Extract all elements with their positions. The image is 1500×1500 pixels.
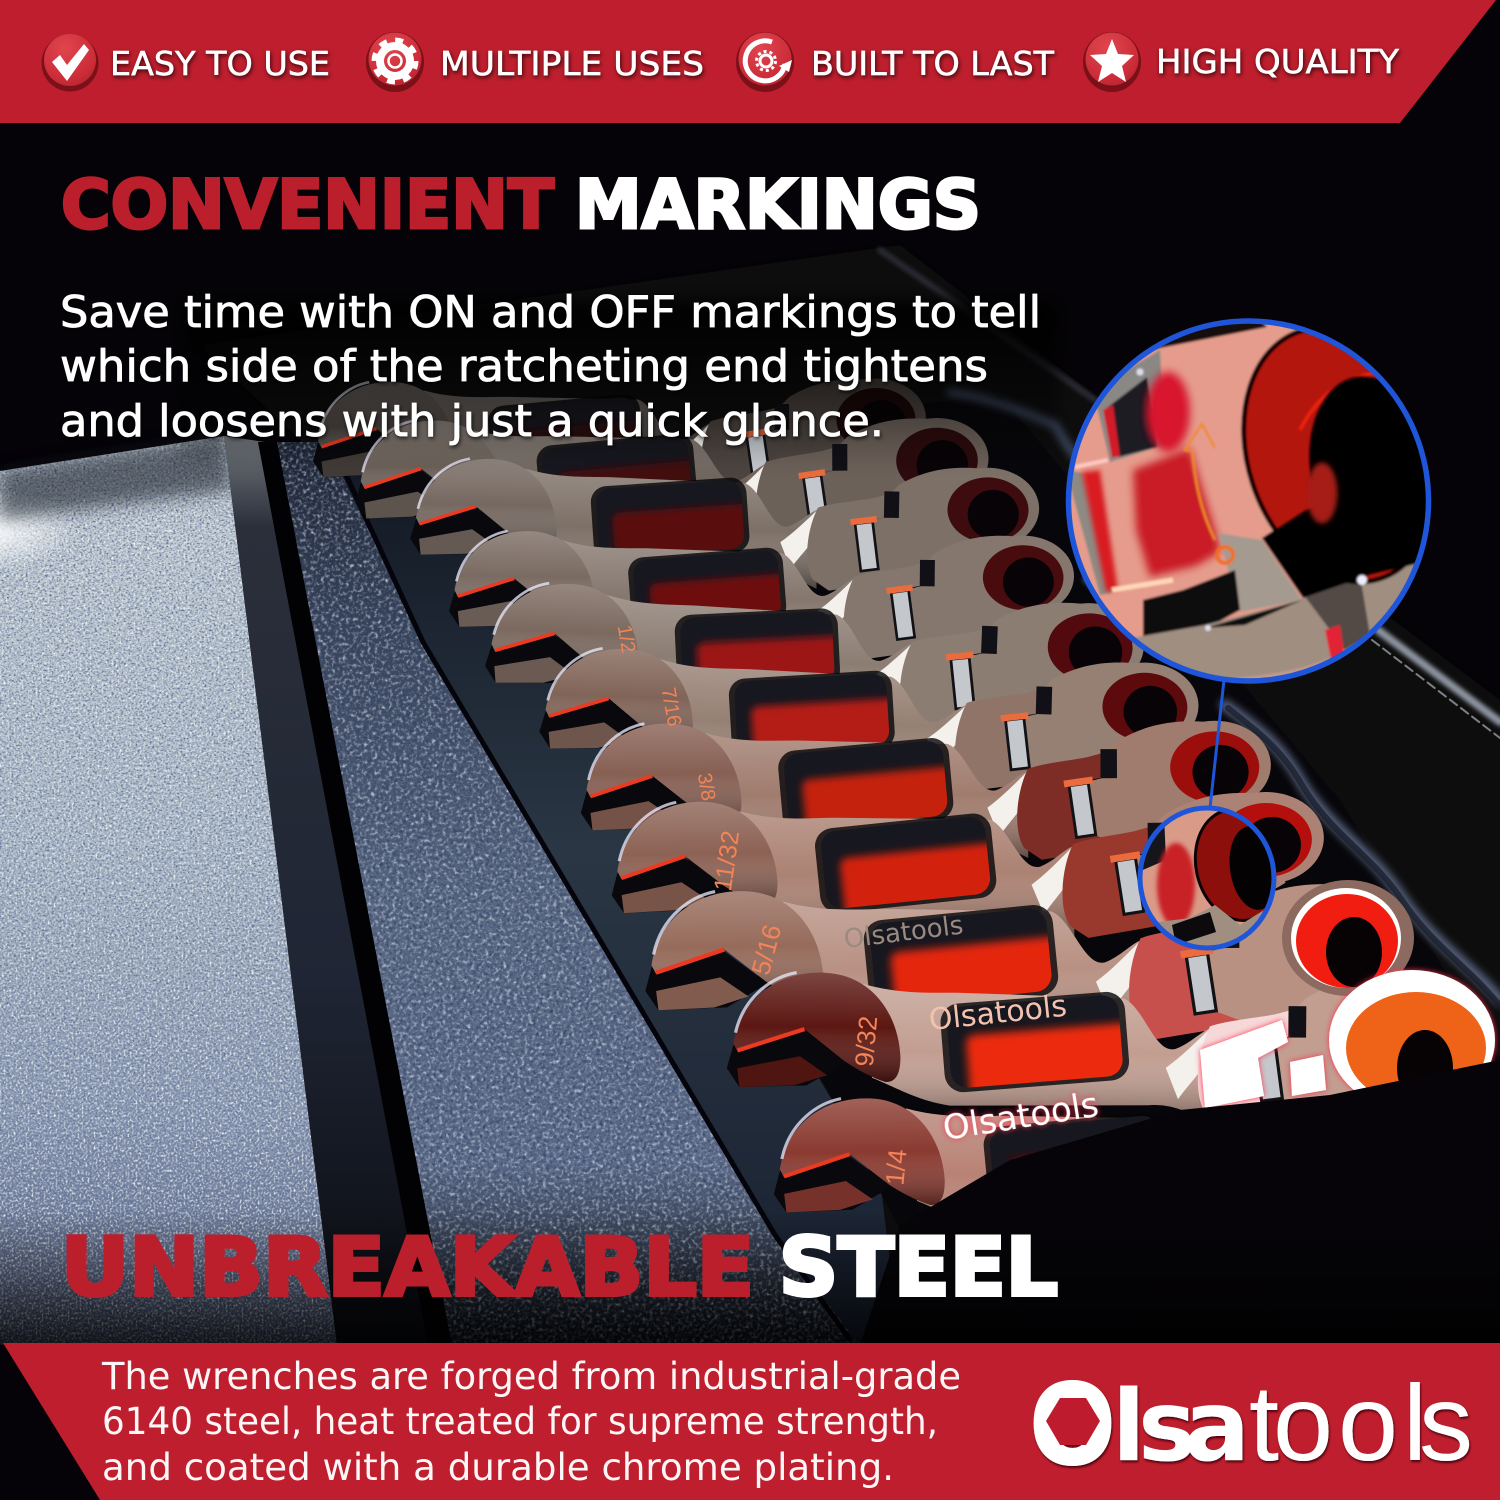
size markings stamped on wrench heads: 3/8 (693, 771, 719, 803)
fabric panel (0, 436, 337, 1345)
wrench row 2 (409, 457, 1040, 595)
bright hinge and ring, row 9 (1200, 970, 1495, 1110)
black seam line (258, 442, 452, 1345)
icon: star badge (1083, 32, 1141, 92)
heading: unbreakable steel: UNBREAKABLE (61, 1221, 754, 1314)
engraved brand text on wrench shanks: Olsatools (940, 1085, 1101, 1149)
wrench row 8, size 5/16 (644, 883, 1411, 1045)
icon: check badge (42, 34, 98, 92)
description text: steel: The wrenches are forged from industrial-grade (101, 1355, 961, 1398)
logo: Olsatools: tools (1249, 1362, 1473, 1483)
size markings stamped on wrench heads (613, 623, 913, 1187)
wrench row 7, size 11/32 (610, 791, 1325, 945)
wrench row 5, size 7/16 (538, 646, 1200, 796)
wrench row 3 (449, 530, 1074, 661)
wrench row 1 (355, 418, 989, 547)
connector line from small circle to magnifier (1210, 680, 1224, 808)
upper tray shadow shape (200, 245, 1500, 1345)
ring glow, row 8 (1282, 880, 1414, 996)
size markings stamped on wrench heads: 7/16 (657, 686, 685, 728)
bottom shadow over photo (0, 1210, 1500, 1345)
description text: markings: and loosens with just a quick glance. (60, 396, 884, 447)
feature: built to last (736, 32, 1055, 92)
engraved brand text on wrench shanks: Olsatools (927, 989, 1068, 1038)
size markings stamped on wrench heads: 5/16 (745, 921, 787, 978)
wrench row 9, size 9/32 (726, 971, 1473, 1127)
feature: built to last: BUILT TO LAST (811, 44, 1055, 83)
heading: unbreakable steel: STEEL (779, 1221, 1058, 1314)
logo: Olsatools (1030, 1361, 1473, 1489)
size markings stamped on wrench heads: 11/32 (709, 829, 745, 893)
dark foreground covering lower wrench (860, 1060, 1500, 1345)
description text: markings: Save time with ON and OFF markings to tell (60, 287, 1041, 338)
description text: markings: which side of the ratcheting end tightens (60, 341, 988, 392)
leather panel (270, 442, 860, 1345)
size markings stamped on wrench heads: 1/2 (613, 623, 639, 655)
icon: gear badge (366, 32, 424, 92)
wrench row 10, size 1/4 (773, 1092, 1500, 1246)
feature: multiple uses (366, 32, 704, 92)
logo: Olsatools: O (1030, 1361, 1115, 1489)
size markings stamped on wrench heads: 9/32 (849, 1015, 883, 1068)
ridge seam between fabric and leather (224, 436, 442, 1345)
heading: unbreakable steel (61, 1221, 1058, 1314)
wrench set (180, 300, 1500, 1345)
feature: multiple uses: MULTIPLE USES (440, 44, 704, 83)
fade behind upper text (180, 300, 1060, 470)
engraved brand text on wrench shanks (842, 911, 1101, 1149)
feature: high quality: HIGH QUALITY (1156, 42, 1400, 81)
small focus circle on wrench (1138, 806, 1276, 950)
wrench row 4, size 1/2 (483, 580, 1145, 737)
logo: Olsatools: lsa (1112, 1370, 1250, 1484)
description text: steel: and coated with a durable chrome plating. (102, 1446, 894, 1489)
leather fold highlights on the right (880, 250, 1500, 1006)
dark cavity behind wrench shanks (470, 395, 1500, 1230)
heading: convenient markings: MARKINGS (575, 166, 981, 245)
icon: cycle gear badge (736, 32, 794, 92)
description text: steel (101, 1355, 961, 1489)
top banner (0, 0, 1496, 123)
size markings stamped on wrench heads: 1/4 (880, 1148, 913, 1187)
feature: high quality (1083, 32, 1400, 92)
bottom banner (3, 1343, 1500, 1500)
heading: convenient markings: CONVENIENT (61, 166, 555, 245)
magnifier circle with close-up of marking (1066, 318, 1432, 684)
tray floor under wrenches (326, 442, 900, 1345)
description text: steel: 6140 steel, heat treated for supreme strength, (102, 1400, 938, 1443)
heading: convenient markings (61, 166, 981, 245)
wrench row 0, faint (313, 378, 926, 504)
feature: easy to use (42, 34, 330, 92)
engraved brand text on wrench shanks: Olsatools (842, 911, 965, 955)
feature: easy to use: EASY TO USE (110, 44, 330, 83)
description text: markings (60, 287, 1041, 447)
wrench row 6, size 3/8 (581, 721, 1271, 861)
